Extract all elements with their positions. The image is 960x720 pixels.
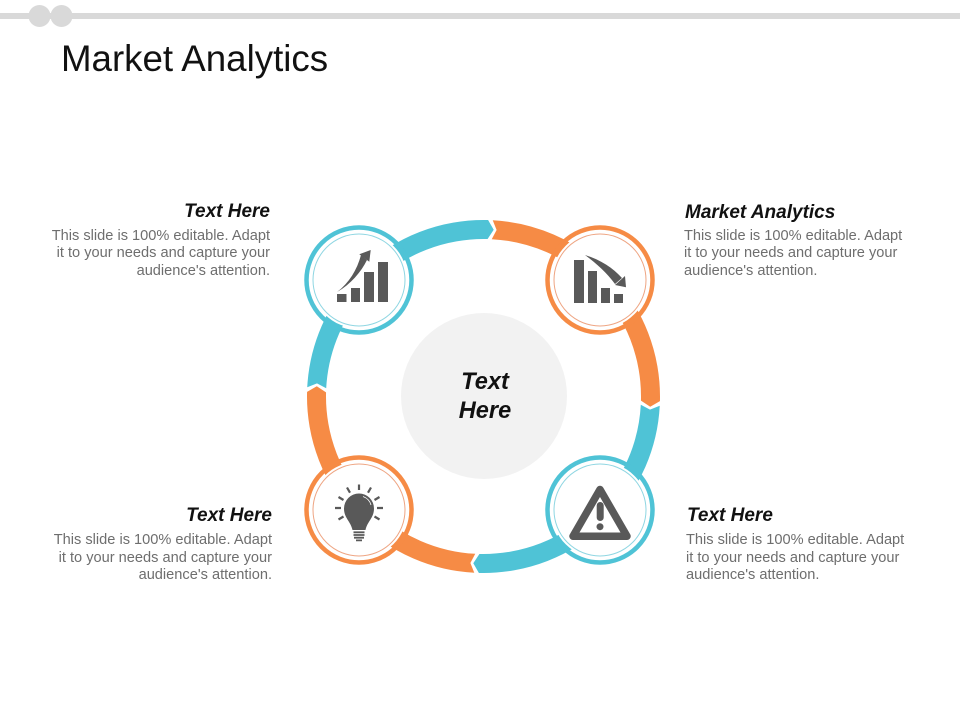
arc: teal right — [597, 405, 660, 519]
center label: Text — [461, 369, 509, 395]
arc: orange right — [597, 274, 660, 407]
arc: orange left — [307, 386, 370, 519]
text block: top right: This slide is 100% editable. Adapt — [684, 228, 902, 244]
text block: top right: it to your needs and capture your — [684, 245, 897, 261]
text block: bottom right: audience's attention. — [686, 567, 819, 583]
text block: bottom left: audience's attention. — [139, 567, 272, 583]
text block: top right: audience's attention. — [684, 262, 817, 278]
text block: top left — [52, 201, 270, 278]
text block: bottom right: Text Here — [687, 505, 773, 526]
text block: top left: Text Here — [184, 201, 270, 222]
text block: bottom left: Text Here — [186, 505, 272, 526]
text block: top left: This slide is 100% editable. Adapt — [52, 228, 270, 244]
arc: teal top — [361, 220, 494, 283]
center label: Here — [459, 398, 511, 424]
top decorative bar — [0, 5, 960, 27]
node: top-right falling chart — [548, 228, 652, 332]
text block: top left: it to your needs and capture your — [57, 245, 270, 261]
ring segments — [307, 220, 660, 573]
text block: bottom left: This slide is 100% editable. Adapt — [54, 532, 272, 548]
icon: rising bars and arrow — [337, 250, 388, 302]
node: bottom-left light bulb — [306, 458, 412, 562]
icon: falling bars and arrow — [574, 255, 626, 303]
arc: teal left — [307, 274, 370, 388]
text block: bottom right: This slide is 100% editable. Adapt — [686, 532, 904, 548]
arc: orange bottom — [361, 510, 475, 573]
text block: bottom right — [686, 505, 904, 583]
icon: warning triangle — [573, 490, 627, 536]
text block: top right — [684, 202, 902, 278]
center circle — [401, 313, 567, 479]
text block: bottom left: it to your needs and capture your — [59, 550, 272, 566]
node: bottom-right warning — [548, 458, 652, 562]
text block: bottom left — [54, 505, 272, 583]
node: top-left growth chart — [306, 228, 412, 332]
arc: orange top — [492, 220, 606, 283]
text block: top right: Market Analytics — [685, 202, 835, 223]
icon: light bulb — [335, 484, 383, 540]
text block: bottom right: it to your needs and capture your — [686, 550, 899, 566]
text block: top left: audience's attention. — [137, 262, 270, 278]
title: Market Analytics — [61, 38, 328, 79]
arc: teal bottom — [473, 510, 606, 573]
center label — [459, 369, 511, 424]
